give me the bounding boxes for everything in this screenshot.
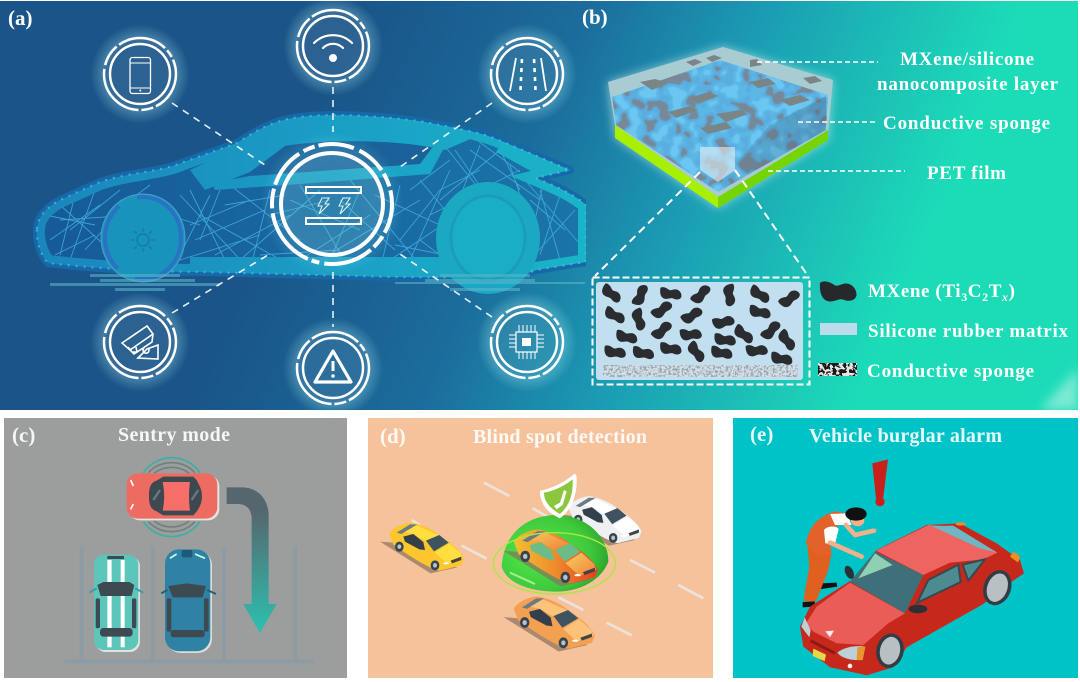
corner highlight xyxy=(1040,368,1078,410)
title: Vehicle burglar alarm: Vehicle burglar alarm xyxy=(809,425,1002,447)
illustration: layered sensor block xyxy=(605,47,835,208)
panel a: smart car scene xyxy=(8,0,586,418)
icon: warning triangle xyxy=(283,318,383,418)
icon: smartphone xyxy=(90,24,190,124)
panel background xyxy=(368,418,713,678)
red car xyxy=(127,473,219,520)
protective dome xyxy=(493,515,615,594)
legend text: MXene: 3 xyxy=(961,290,968,304)
inset: composite cross section xyxy=(592,278,810,384)
label (b): (b) xyxy=(582,5,608,29)
panels a and b background xyxy=(0,1,1078,410)
burglar figure xyxy=(803,507,874,607)
scene: road with cars xyxy=(380,473,703,652)
label (c): (c) xyxy=(12,423,35,447)
legend text: silicone rubber matrix: Silicone rubber matrix xyxy=(868,321,1068,342)
label: PET film: PET film xyxy=(927,163,1006,184)
exclamation mark xyxy=(872,459,888,506)
title: Blind spot detection: Blind spot detection xyxy=(473,426,647,448)
legend swatch: conductive sponge xyxy=(818,363,857,376)
icon: road xyxy=(477,24,577,124)
legend text: MXene: 2 xyxy=(982,290,989,304)
yellow car xyxy=(380,523,464,573)
title: Sentry mode: Sentry mode xyxy=(118,424,230,446)
blue car xyxy=(161,549,216,653)
shield icon xyxy=(540,473,577,518)
legend text: MXene: x xyxy=(1001,290,1009,304)
parking lines xyxy=(63,547,313,662)
white car xyxy=(559,496,642,546)
legend text: MXene: ) xyxy=(1009,281,1016,302)
panel e: vehicle burglar alarm xyxy=(733,418,1078,678)
legend text: conductive sponge: Conductive sponge xyxy=(867,361,1034,382)
legend swatch: silicone rubber xyxy=(820,323,857,335)
orange car xyxy=(504,597,595,652)
label (e): (e) xyxy=(750,422,773,446)
panel b: sensor structure xyxy=(582,5,1068,384)
icon: central pressure sensor xyxy=(260,132,404,276)
zoom guide lines xyxy=(595,170,808,276)
callout lines xyxy=(757,62,905,171)
scene: burglar at car xyxy=(800,459,1024,675)
panel background xyxy=(4,418,347,678)
dashed connectors xyxy=(172,87,492,327)
road markings xyxy=(412,483,703,635)
teal striped car xyxy=(89,555,143,652)
scene: parking lot xyxy=(63,458,313,662)
red car xyxy=(800,522,1024,675)
legend text: MXene: C xyxy=(968,281,982,302)
sonar arcs xyxy=(143,458,200,537)
label: nanocomposite layer: nanocomposite layer xyxy=(877,74,1059,95)
panel background xyxy=(733,418,1078,678)
label: MXene/silicone: MXene/silicone xyxy=(900,49,1034,70)
icon: processor chip xyxy=(477,292,577,392)
legend text: MXene: T xyxy=(989,281,1002,302)
legend swatch: MXene flake xyxy=(820,281,857,301)
arrow xyxy=(227,487,277,633)
label (d): (d) xyxy=(380,424,406,448)
icon: wifi xyxy=(283,0,383,96)
legend text: MXene: MXene (Ti xyxy=(868,281,961,302)
label: conductive sponge: Conductive sponge xyxy=(883,113,1050,134)
label (a): (a) xyxy=(8,6,32,30)
panel c: sentry mode xyxy=(4,418,347,678)
panel d: blind spot detection xyxy=(368,418,713,678)
icon: security camera xyxy=(90,292,190,392)
illustration: mesh car silhouette xyxy=(37,115,586,294)
